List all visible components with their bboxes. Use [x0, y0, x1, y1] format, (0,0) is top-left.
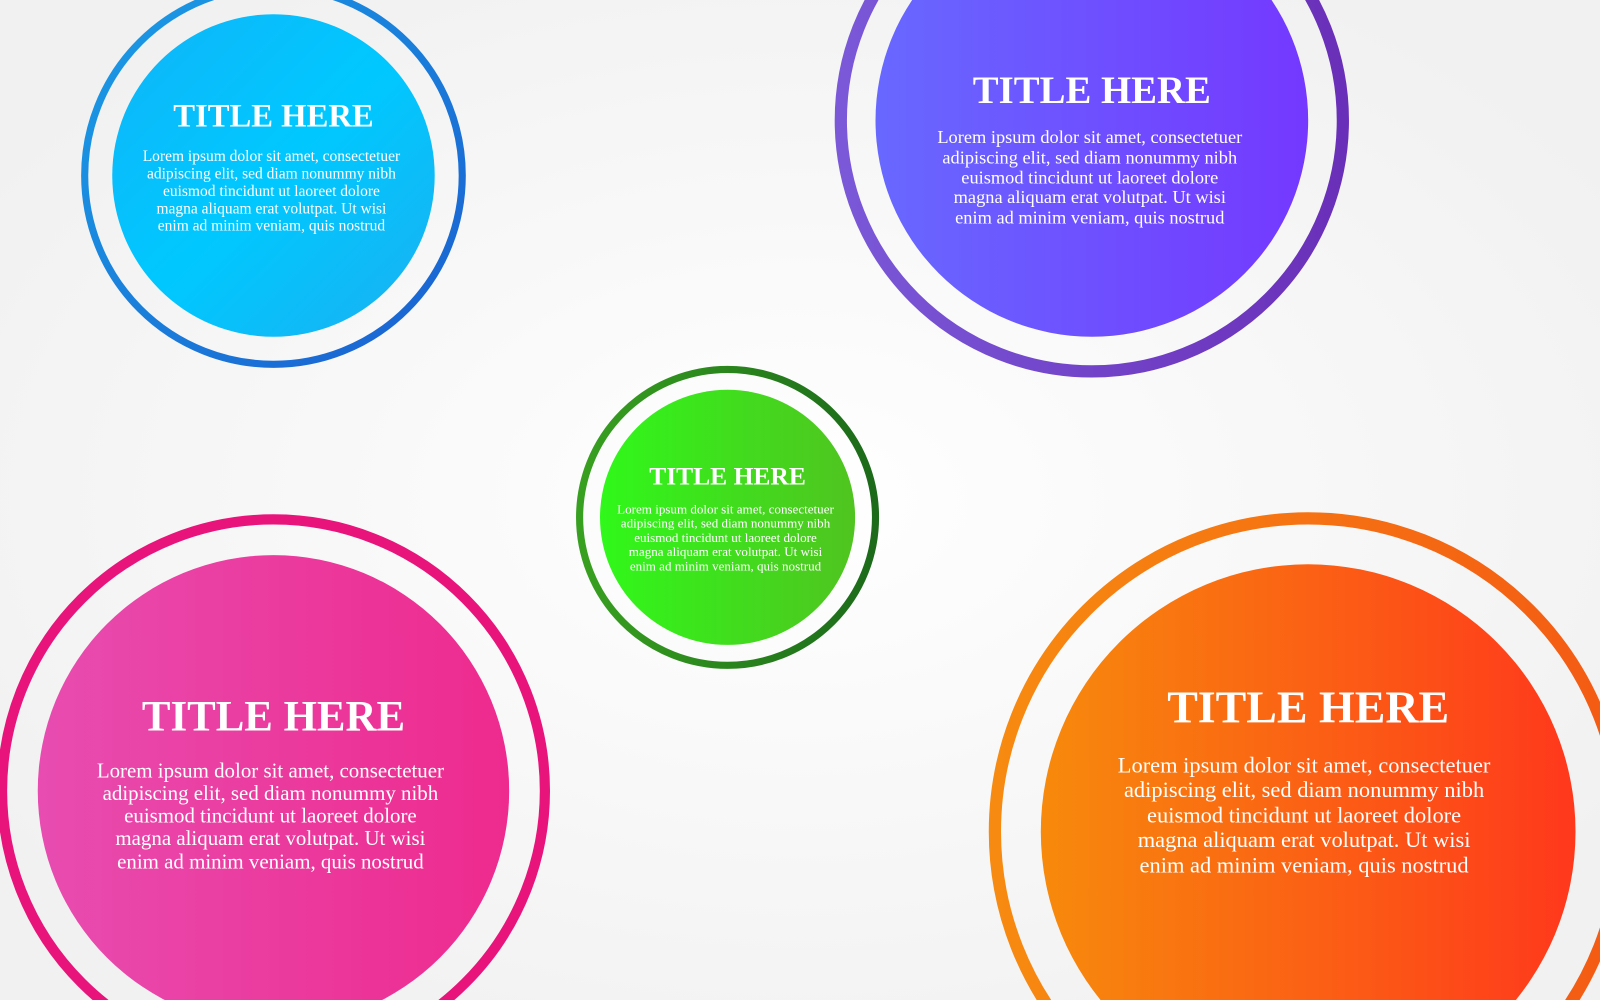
panel: blue circle — [85, 0, 462, 364]
panel: pink circle — [2, 519, 545, 1000]
green body text — [617, 501, 834, 573]
blue body text: enim ad minim veniam, quis nostrud — [158, 218, 385, 235]
panel: green circle — [580, 369, 876, 665]
purple title: TITLE HERE — [973, 69, 1211, 112]
green body text: enim ad minim veniam, quis nostrud — [630, 558, 822, 573]
purple body text: Lorem ipsum dolor sit amet, consectetuer — [937, 127, 1242, 147]
green body text: magna aliquam erat volutpat. Ut wisi — [629, 544, 823, 559]
blue body text: euismod tincidunt ut laoreet dolore — [163, 183, 380, 200]
blue body text: adipiscing elit, sed diam nonummy nibh — [147, 166, 396, 183]
green body text: adipiscing elit, sed diam nonummy nibh — [621, 516, 831, 531]
purple body text: magna aliquam erat volutpat. Ut wisi — [954, 187, 1226, 207]
purple body text: enim ad minim veniam, quis nostrud — [955, 207, 1224, 227]
purple body text: euismod tincidunt ut laoreet dolore — [961, 168, 1218, 188]
orange body text: enim ad minim veniam, quis nostrud — [1140, 852, 1469, 877]
orange title: TITLE HERE — [1167, 681, 1449, 732]
pink body text: Lorem ipsum dolor sit amet, consectetuer — [97, 759, 444, 783]
blue body text — [143, 148, 401, 235]
blue body text: magna aliquam erat volutpat. Ut wisi — [156, 200, 387, 217]
orange body text: Lorem ipsum dolor sit amet, consectetuer — [1118, 752, 1491, 777]
green body text: Lorem ipsum dolor sit amet, consectetuer — [617, 501, 834, 516]
orange body text: magna aliquam erat volutpat. Ut wisi — [1138, 827, 1470, 852]
purple body text — [937, 127, 1242, 227]
panel: orange circle — [995, 518, 1600, 1000]
orange body text: adipiscing elit, sed diam nonummy nibh — [1124, 777, 1484, 802]
purple body text: adipiscing elit, sed diam nonummy nibh — [942, 147, 1237, 167]
pink body text: adipiscing elit, sed diam nonummy nibh — [103, 781, 439, 805]
pink body text: euismod tincidunt ut laoreet dolore — [124, 803, 417, 827]
pink title: TITLE HERE — [142, 694, 405, 741]
panel: purple circle — [841, 0, 1343, 371]
orange body text — [1118, 752, 1491, 877]
pink body text: magna aliquam erat volutpat. Ut wisi — [115, 826, 426, 850]
pink body text — [97, 759, 444, 873]
green title: TITLE HERE — [649, 462, 806, 491]
pink body text: enim ad minim veniam, quis nostrud — [117, 849, 424, 873]
green body text: euismod tincidunt ut laoreet dolore — [634, 530, 817, 545]
blue body text: Lorem ipsum dolor sit amet, consectetuer — [143, 148, 401, 165]
orange body text: euismod tincidunt ut laoreet dolore — [1147, 802, 1461, 827]
blue title: TITLE HERE — [173, 99, 374, 135]
